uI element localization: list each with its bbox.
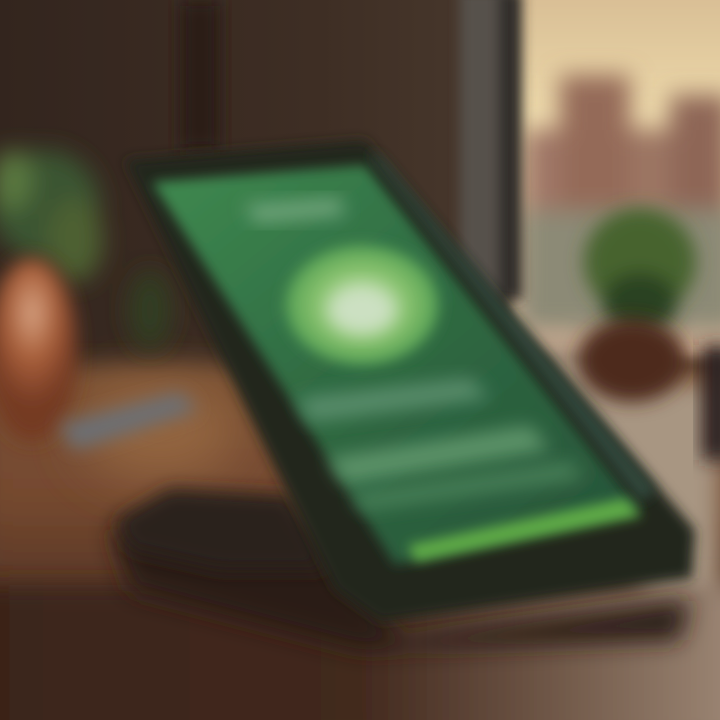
phone: dark body xyxy=(125,140,695,622)
plant: right potted plant leaves xyxy=(584,208,696,332)
phone: text line one xyxy=(298,378,490,422)
object: dark item at right edge xyxy=(702,345,720,460)
object: small grey item on table xyxy=(58,392,198,450)
plant: left terracotta pot xyxy=(0,258,78,442)
background: dark brown wall xyxy=(0,0,530,420)
table surface: bright right side xyxy=(530,335,720,610)
phone: side edge highlight xyxy=(368,152,655,502)
background: dark vertical wall band xyxy=(180,0,220,150)
table surface xyxy=(0,365,720,605)
phone: app logo centre xyxy=(328,286,396,334)
phone: app title bar xyxy=(245,198,345,223)
phone: text line three xyxy=(350,462,585,510)
table surface: warm wood glow at left xyxy=(80,380,240,480)
phone: bright green button xyxy=(408,498,642,562)
plant: right dark pot xyxy=(578,318,686,402)
stand: dark phone stand base xyxy=(115,488,330,570)
shadow: phone shadow on table xyxy=(110,520,690,650)
background: grey window frame xyxy=(460,0,522,300)
phone xyxy=(125,140,695,622)
phone: text line two xyxy=(328,425,550,484)
background: blurred city buildings xyxy=(520,75,720,330)
plant: left potted plant leaves xyxy=(0,150,172,350)
background: window with sky xyxy=(510,0,720,360)
table surface: dark front edge xyxy=(0,585,720,720)
phone: app logo glow xyxy=(278,239,446,371)
phone: green screen xyxy=(152,165,640,565)
